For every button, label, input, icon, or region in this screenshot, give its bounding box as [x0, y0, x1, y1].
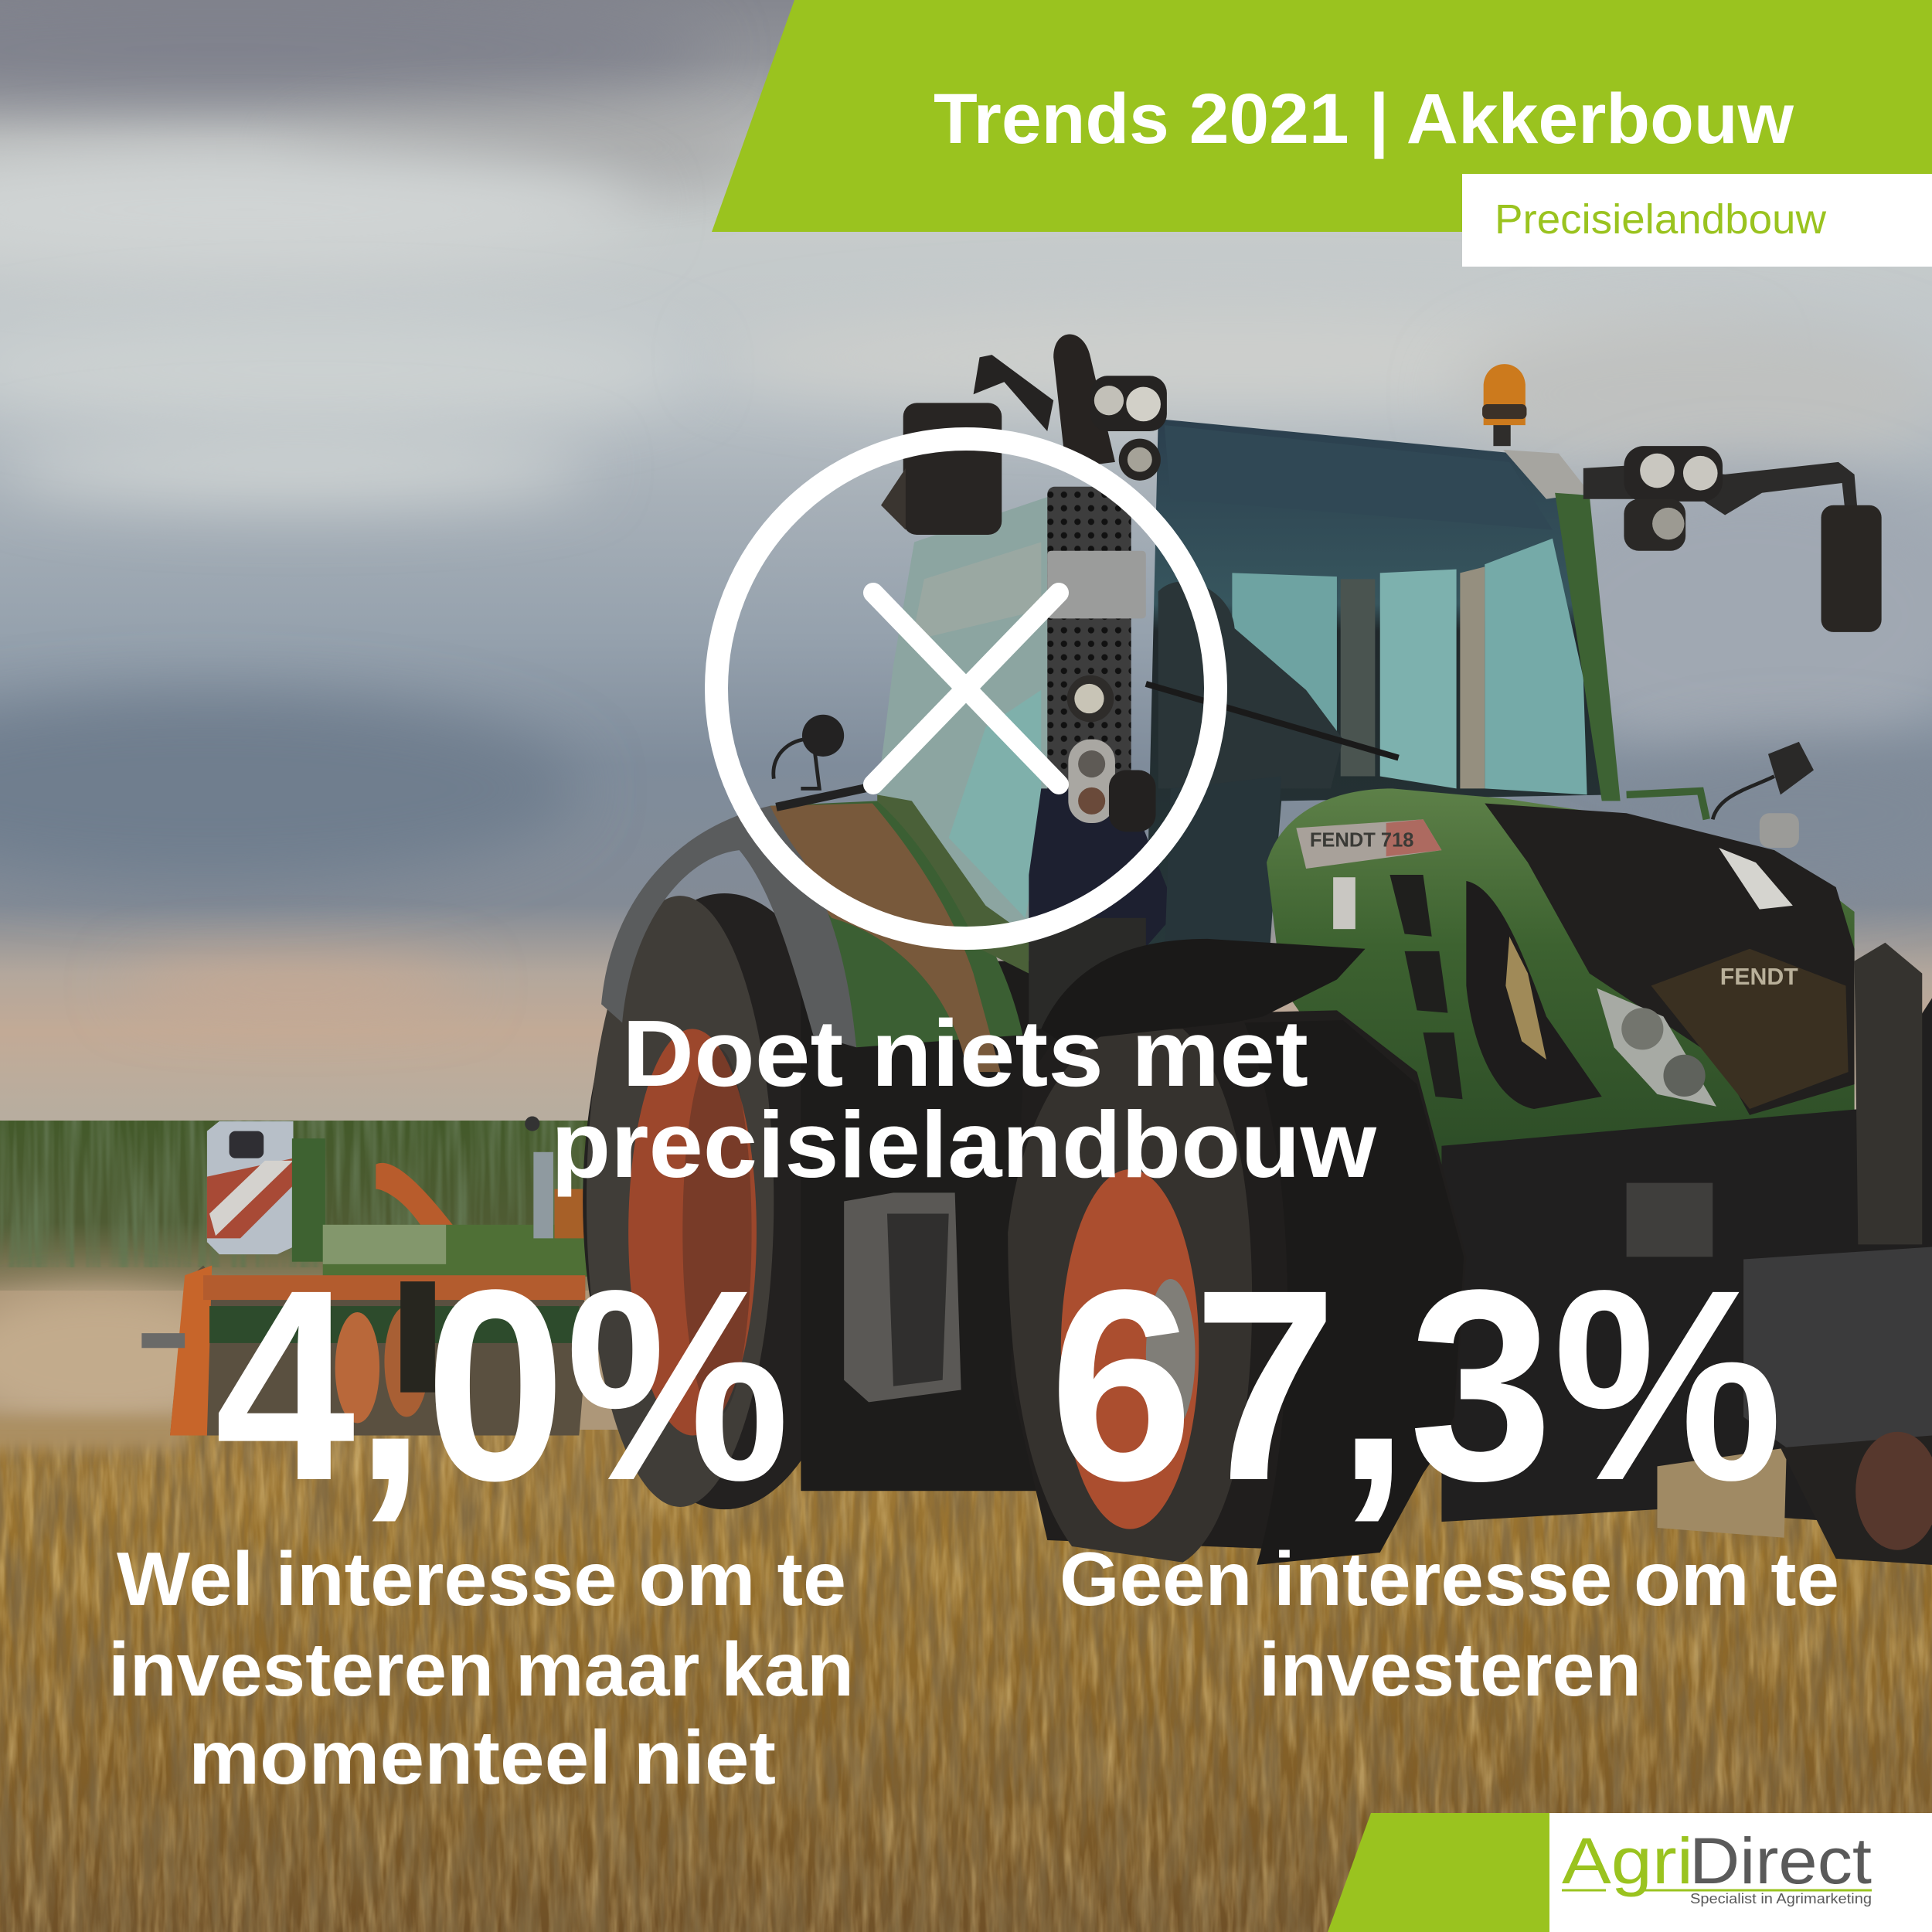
category heading — [551, 1001, 1377, 1197]
left side mirror — [881, 355, 1053, 535]
front wheel mudguard — [1041, 939, 1366, 1041]
distant corn field — [0, 1121, 696, 1306]
perforated exhaust stack — [1029, 334, 1177, 1029]
cab roof and green rear pillar — [1503, 450, 1621, 801]
footer: green corner — [1328, 1813, 1553, 1932]
footer: AgriDirect logo — [1549, 1813, 1932, 1932]
lower cab frame — [1146, 684, 1399, 961]
caption: 67,3%: Geen interesse om te — [1060, 1536, 1839, 1621]
black front grille: FENDT — [1720, 964, 1798, 990]
rear tractor wheel — [583, 893, 866, 1509]
green engine hood — [1267, 788, 1855, 1183]
category heading: precisielandbouw — [551, 1092, 1377, 1197]
green engine hood: FENDT 718 — [1310, 829, 1413, 851]
fender — [601, 801, 1022, 1072]
caption: 4,0%: investeren maar kan — [108, 1627, 854, 1712]
category heading: Doet niets met — [622, 1001, 1308, 1106]
sky background — [0, 0, 1932, 1159]
stat: 67,3%: 67,3% — [1049, 1233, 1783, 1537]
towed cultivator implement — [141, 1117, 589, 1435]
cab windows — [1146, 419, 1614, 949]
footer: AgriDirect logo: Agri — [1562, 1825, 1693, 1897]
stubble field — [0, 1416, 1932, 1932]
orange beacon — [1482, 364, 1526, 446]
subtitle tag: Precisielandbouw — [1495, 196, 1827, 243]
caption: 4,0% — [108, 1536, 854, 1800]
subtitle tag — [1462, 174, 1932, 267]
operator in cab — [1158, 581, 1343, 788]
footer: AgriDirect logo: Specialist in Agrimarketing — [1690, 1891, 1872, 1906]
small side lamps — [774, 715, 1814, 848]
header: green banner — [712, 0, 1932, 232]
work lights on exhaust — [1067, 675, 1156, 832]
caption: 4,0%: momenteel niet — [189, 1715, 776, 1800]
front axle and chassis — [1441, 943, 1932, 1565]
caption: 67,3%: investeren — [1259, 1627, 1641, 1712]
dusty ground — [0, 1291, 773, 1461]
caption: 4,0%: Wel interesse om te — [117, 1536, 846, 1621]
icon: circled X — [716, 439, 1216, 938]
tractor body between wheels — [801, 961, 1060, 1491]
stat: 4,0%: 4,0% — [215, 1233, 790, 1537]
left windscreen — [877, 493, 1060, 974]
heading: Trends 2021 | Akkerbouw: Trends 2021 | Akkerbouw — [934, 80, 1794, 159]
caption: 67,3% — [1060, 1536, 1839, 1712]
right mirror arm and lights — [1583, 446, 1882, 632]
black front grille — [1485, 804, 1855, 1115]
top work lights — [1090, 376, 1167, 481]
front tractor wheel — [1008, 1010, 1466, 1565]
footer: AgriDirect logo: Direct — [1689, 1825, 1872, 1897]
